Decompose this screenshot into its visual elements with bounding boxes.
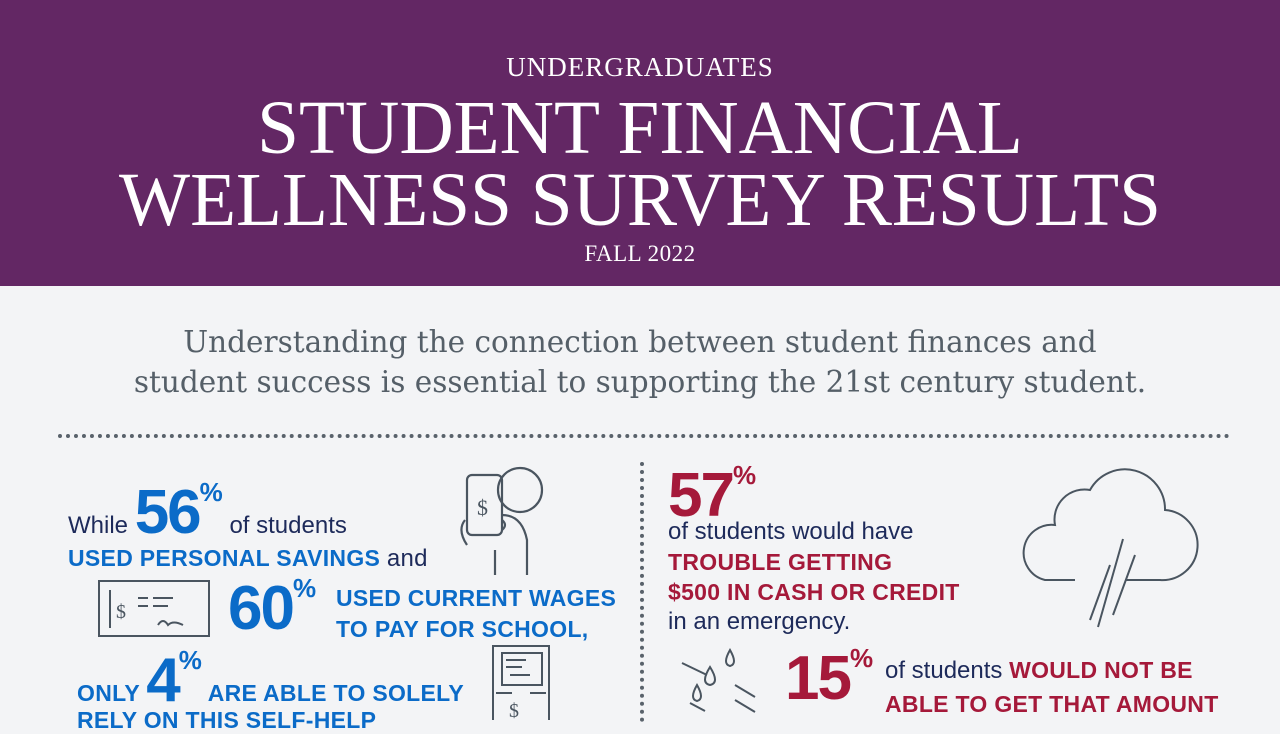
stat 60%: 60% bbox=[228, 573, 316, 643]
stat 57%: 57% bbox=[668, 460, 756, 530]
panel: self-help funding: RELY ON THIS SELF-HELP bbox=[77, 707, 376, 733]
title bbox=[119, 86, 1161, 242]
text: trouble getting $500 bbox=[668, 518, 960, 635]
header banner bbox=[0, 0, 1280, 286]
text: trouble getting $500: in an emergency. bbox=[668, 608, 850, 635]
icon: phone person: $ bbox=[477, 495, 488, 520]
text: trouble getting $500: TROUBLE GETTING bbox=[668, 549, 892, 575]
title: STUDENT FINANCIAL bbox=[257, 86, 1023, 170]
text: would not be able bbox=[885, 657, 1219, 717]
text: personal savings: USED PERSONAL SAVINGS and bbox=[68, 545, 428, 572]
stat 56%: While 56% of students bbox=[68, 477, 347, 547]
stat 15%: 15% bbox=[785, 643, 873, 713]
intro text: student success is essential to supporting the 21st century student. bbox=[134, 365, 1146, 399]
text: current wages: TO PAY FOR SCHOOL, bbox=[336, 616, 588, 642]
icon: rain cloud bbox=[1022, 468, 1199, 628]
intro text: Understanding the connection between student finances and bbox=[183, 325, 1097, 359]
icon: check bbox=[98, 580, 210, 637]
text: current wages: USED CURRENT WAGES bbox=[336, 585, 616, 611]
title: WELLNESS SURVEY RESULTS bbox=[119, 158, 1161, 242]
icon: ATM bbox=[492, 645, 550, 720]
stat 4%: ONLY 4% ARE ABLE TO SOLELY bbox=[77, 645, 464, 715]
text: current wages bbox=[336, 585, 616, 642]
text: trouble getting $500: $500 IN CASH OR CREDIT bbox=[668, 579, 960, 605]
icon: phone person bbox=[460, 466, 544, 575]
panel: self-help funding bbox=[68, 466, 616, 733]
panel: emergency funds bbox=[668, 460, 1219, 717]
icon: hand with drops bbox=[682, 648, 756, 713]
intro text bbox=[134, 325, 1146, 399]
date: FALL 2022 bbox=[584, 241, 696, 266]
icon: check: $ bbox=[116, 601, 126, 623]
subtitle: undergraduates: UNDERGRADUATES bbox=[506, 52, 774, 82]
text: would not be able: ABLE TO GET THAT AMOUNT bbox=[885, 691, 1219, 717]
text: would not be able: of students WOULD NOT BE bbox=[885, 657, 1193, 684]
text: trouble getting $500: of students would have bbox=[668, 518, 914, 545]
